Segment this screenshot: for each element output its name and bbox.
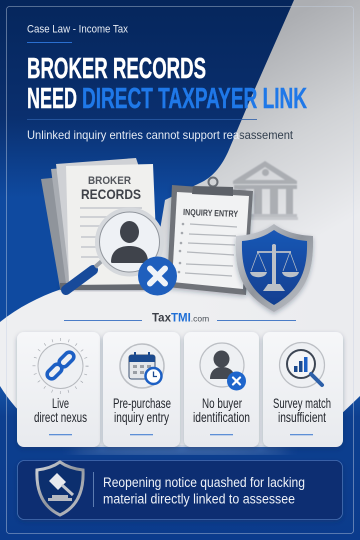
eyebrow underline — [27, 42, 72, 43]
illustration: courthouse — [230, 161, 298, 220]
label: Pre-purchase — [113, 395, 171, 411]
illustration: inquiry clipboard — [167, 178, 253, 295]
card: pre-purchase inquiry entry — [103, 332, 180, 447]
icon: person with x — [200, 343, 246, 390]
card: live direct nexus: direct nexus — [34, 409, 87, 425]
brand: TaxTMI.com: TaxTMI.com — [152, 312, 209, 324]
inquiry entry label: INQUIRY ENTRY — [183, 207, 238, 219]
icon: calendar clock — [120, 344, 164, 388]
card: survey match insufficient — [263, 332, 343, 447]
title — [27, 53, 307, 115]
illustration: magnifier with person — [66, 210, 162, 290]
conclusion text: Reopening notice quashed for lacking — [103, 475, 305, 490]
label: Survey match — [273, 395, 331, 411]
label: Live — [52, 395, 69, 411]
panel: conclusion: material directly linked to assessee — [103, 492, 295, 506]
subtitle: Unlinked inquiry entries cannot support reasassement — [27, 128, 294, 142]
title: NEED — [27, 83, 77, 115]
card: no buyer identification — [184, 332, 259, 447]
card: live direct nexus — [17, 332, 100, 447]
icon: red-cross badge — [138, 256, 177, 296]
title rule — [27, 119, 257, 120]
eyebrow: case law: Case Law - Income Tax — [27, 24, 129, 36]
icon: chain link — [34, 340, 87, 392]
panel: conclusion — [18, 460, 342, 520]
icon: magnifier chart — [280, 342, 324, 388]
icon: gavel shield — [37, 462, 83, 515]
illustration: broker records papers: RECORDS — [81, 186, 141, 202]
card: pre-purchase inquiry entry: inquiry entry — [114, 409, 169, 425]
broker records label: BROKER — [88, 175, 131, 187]
illustration: broker records papers — [41, 158, 162, 290]
card: survey match insufficient: insufficient — [278, 409, 326, 425]
card: no buyer identification: identification — [193, 409, 250, 425]
label: No buyer — [202, 395, 242, 411]
title: BROKER RECORDS — [27, 53, 206, 85]
illustration: scales shield — [236, 224, 313, 312]
